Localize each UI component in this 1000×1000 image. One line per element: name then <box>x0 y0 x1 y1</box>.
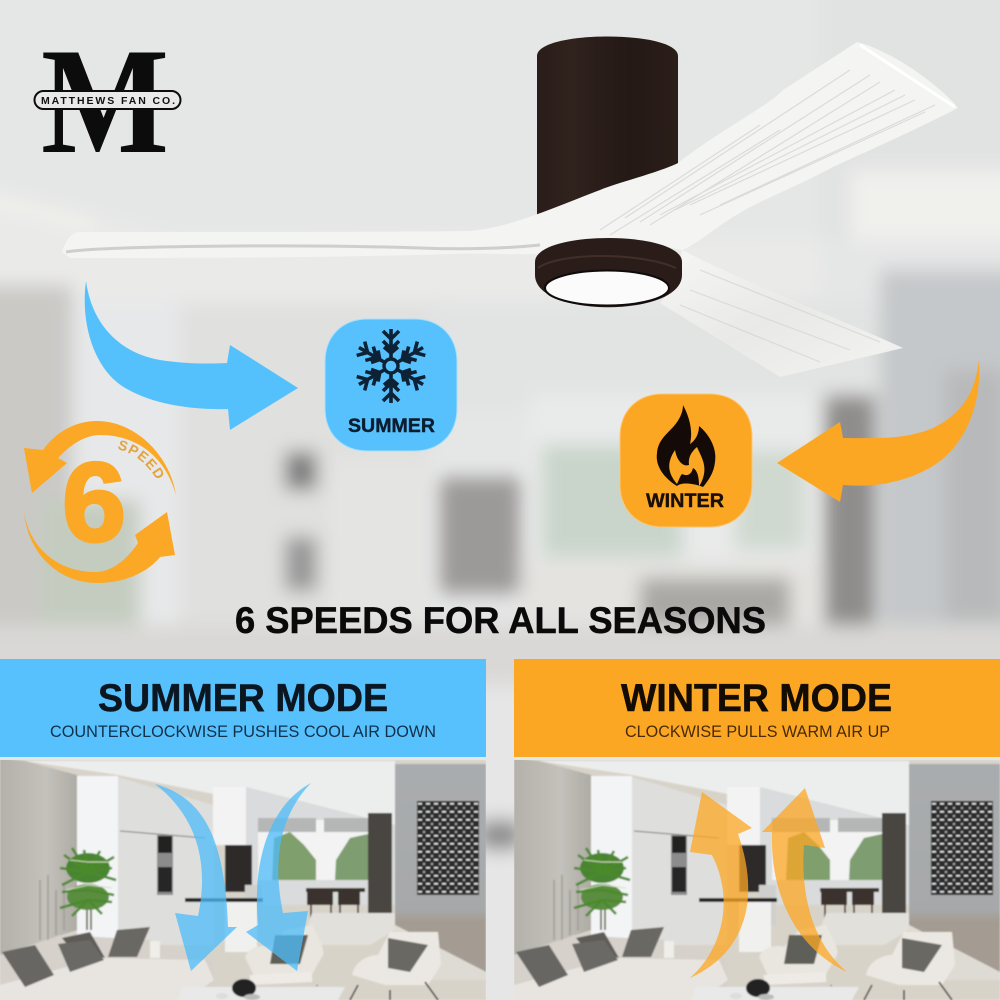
logo: Matthews Fan Co: MATTHEWS FAN CO. <box>41 95 175 107</box>
winter header bar <box>514 659 1000 757</box>
summer room photo <box>0 758 486 1000</box>
arrow: cool air down right <box>246 783 311 971</box>
winter heading: WINTER MODE <box>621 677 892 720</box>
panel: summer mode <box>0 659 486 1000</box>
arrow: warm air up left <box>690 792 752 978</box>
fan light ring <box>535 238 682 307</box>
winter description: CLOCKWISE PULLS WARM AIR UP <box>625 723 890 741</box>
summer heading: SUMMER MODE <box>98 677 388 720</box>
icon card: winter <box>620 394 752 527</box>
fan motor housing <box>537 36 678 216</box>
icon: flame <box>657 405 715 487</box>
ceiling fan <box>62 36 958 377</box>
panel: winter mode <box>514 659 1000 1000</box>
icon: 6 speed badge <box>24 421 176 583</box>
winter room photo <box>514 758 1000 1000</box>
main title: 6 SPEEDS FOR ALL SEASONS <box>235 600 766 641</box>
fan blade: left and upper right <box>62 42 958 258</box>
logo: Matthews Fan Co: M <box>41 17 169 185</box>
large numeral 6: 6 <box>62 440 126 565</box>
fan blade: lower right <box>660 250 903 377</box>
rotation arrow: bottom <box>24 512 175 583</box>
summer label: SUMMER <box>348 416 435 437</box>
speed label: SPEED <box>118 440 164 478</box>
icon card: summer <box>325 319 457 451</box>
arrow: cool air down left <box>155 784 237 971</box>
summer header bar <box>0 659 486 757</box>
icon: snowflake <box>355 329 427 403</box>
winter label: WINTER <box>646 491 724 512</box>
summer description: COUNTERCLOCKWISE PUSHES COOL AIR DOWN <box>50 723 436 741</box>
rotation arrow: top <box>24 421 176 495</box>
arrow: summer blue <box>85 281 298 430</box>
arrow: winter orange <box>777 360 979 502</box>
arrow: warm air up right <box>762 788 847 972</box>
